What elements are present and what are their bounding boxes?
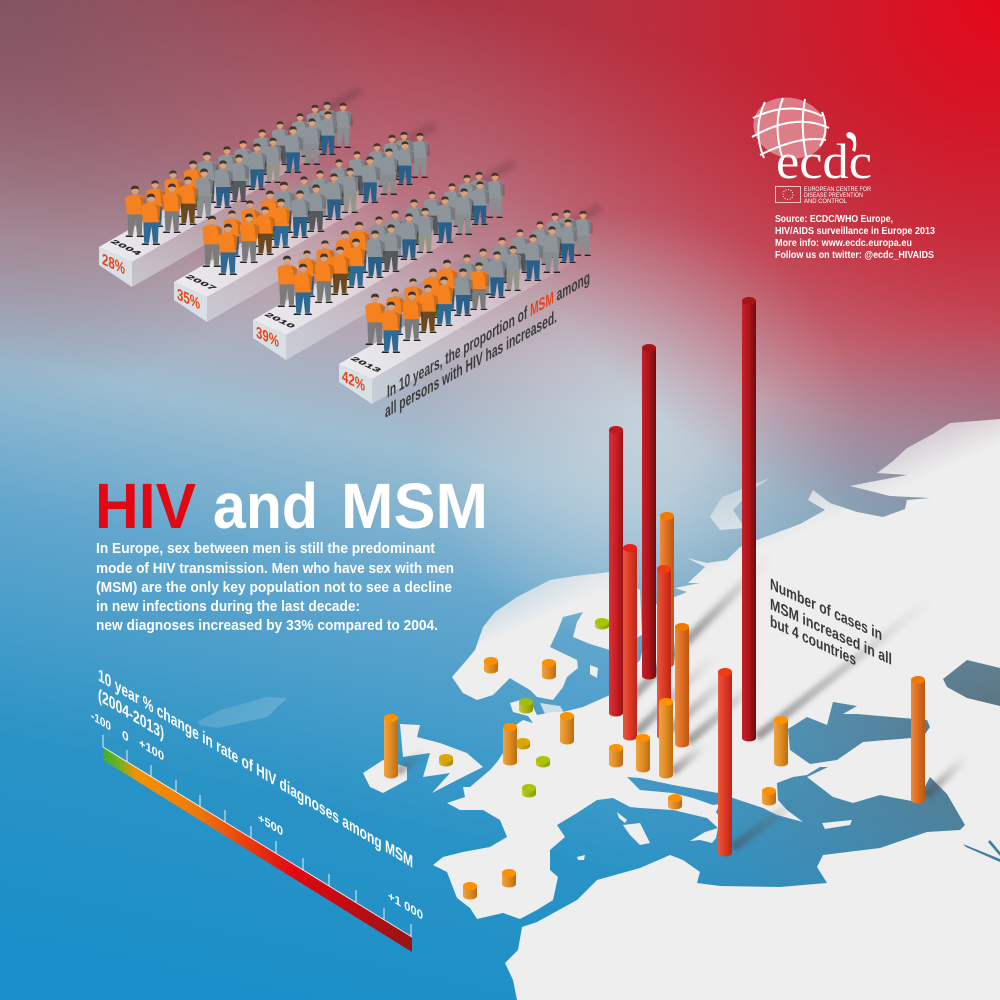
source text: HIV/AIDS surveillance in Europe 2013 [775, 226, 935, 237]
caption: proportion of MSM: In 10 years, the proportion of MSM among [387, 267, 590, 402]
title: HIV [95, 470, 196, 542]
platform [339, 207, 612, 404]
bar: Spain, Portugal and small countries [384, 618, 682, 900]
platform: 2010 [262, 312, 298, 330]
callout: number of cases: Number of cases in [770, 575, 882, 644]
northern land fragment [710, 478, 770, 530]
platform: 2004 [108, 239, 144, 257]
platform [253, 163, 526, 360]
scale ticks [103, 735, 412, 937]
organisation name: EUROPEAN CENTRE FOR [804, 186, 871, 193]
continental Europe, Russia, Turkey and North Africa [433, 419, 1000, 1000]
intro paragraph: mode of HIV transmission. Men who have sex with men [96, 561, 454, 577]
Iceland [197, 697, 287, 728]
scale labels [91, 708, 423, 923]
intro paragraph: new diagnoses increased by 33% compared to 2004. [96, 618, 438, 634]
Scandinavia [452, 572, 642, 700]
ECDC logo [746, 89, 872, 205]
wordmark: ecdc [776, 133, 872, 189]
organisation name: DISEASE PREVENTION [804, 192, 863, 199]
colour bar [103, 747, 412, 952]
platform: 35% [177, 285, 200, 313]
Ireland [363, 760, 407, 793]
platform: 42% [342, 367, 365, 395]
title: MSM [341, 470, 488, 542]
legend title [98, 664, 413, 872]
icon: globe [746, 89, 834, 167]
scale labels: 0 [122, 727, 129, 745]
platform [99, 90, 372, 287]
intro paragraph: (MSM) are the only key population not to see a decline [96, 580, 452, 596]
people [277, 172, 505, 315]
platform: 2007 [183, 274, 219, 292]
platform: 39% [256, 323, 279, 351]
title: and [213, 470, 318, 542]
callout: number of cases: but 4 countries [770, 612, 856, 669]
icon: swirl above d [846, 132, 856, 152]
sea inlets, Suez and Red Sea [963, 840, 1000, 862]
source text: More info: www.ecdc.europa.eu [775, 238, 912, 249]
legend: colour scale [91, 664, 423, 952]
platform 2013 with people [339, 207, 612, 404]
cylinder shadows [397, 555, 967, 848]
legend title: 10 year % change in rate of HIV diagnoses among MSM [98, 664, 413, 872]
platform 2004 with people [99, 90, 372, 287]
source text [775, 214, 935, 261]
source text: Source: ECDC/WHO Europe, [775, 214, 893, 225]
organisation name: AND CONTROL [804, 198, 847, 205]
caption: proportion of MSM: all persons with HIV has increased. [385, 306, 557, 422]
EU emblem [776, 186, 800, 202]
scale labels: +500 [258, 810, 283, 839]
platform [174, 125, 447, 322]
Great Britain [400, 724, 483, 793]
platform: 2013 [348, 356, 384, 374]
people [202, 132, 430, 275]
map of Europe [197, 419, 1000, 1000]
platform: 28% [102, 250, 125, 278]
people [365, 210, 593, 353]
intro paragraph: in new infections during the last decade: [96, 599, 360, 615]
platform 2007 with people [174, 125, 447, 322]
scale labels: -100 [91, 708, 111, 734]
people [125, 102, 353, 245]
scale labels: +100 [139, 735, 164, 764]
platform 2010 with people [253, 163, 526, 360]
intro paragraph: In Europe, sex between men is still the predominant [96, 541, 435, 557]
intro paragraph [96, 541, 454, 634]
callout: number of cases: MSM increased in all [770, 595, 892, 669]
bar: tall central and eastern Europe bars [609, 297, 925, 856]
title [95, 470, 488, 542]
source text: Follow us on twitter: @ecdc_HIVAIDS [775, 250, 934, 261]
caption: proportion of MSM [385, 267, 590, 422]
scale labels: +1 000 [388, 888, 423, 923]
organisation name [804, 186, 871, 205]
Mediterranean and Baltic islands [577, 665, 945, 860]
legend title: (2004-2013) [98, 684, 164, 743]
